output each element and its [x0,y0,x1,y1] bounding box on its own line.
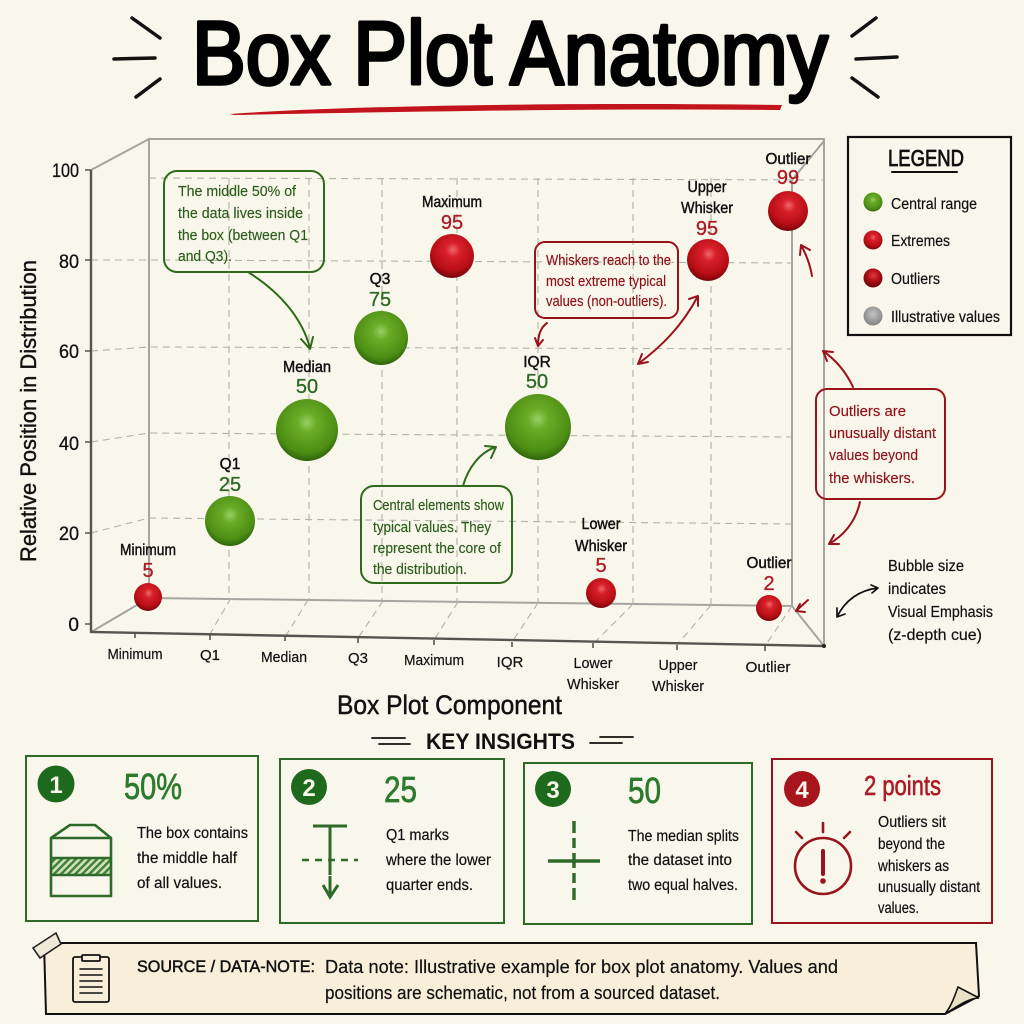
insight card 4: whiskers as [877,858,949,875]
insight card 3 [524,763,752,924]
bubble: Lower Whisker 5: Whisker [575,538,627,555]
icon: clipboard [73,955,109,1002]
x axis tick labels: Whisker [652,678,704,695]
heading: key insights [372,729,633,754]
bubble: Outlier 2: 2 [763,573,775,595]
bubble: IQR 50 [505,354,571,460]
source note banner: SOURCE / DATA-NOTE: [137,957,315,976]
icon: median split [548,821,600,900]
bubble: Q3 75 [354,271,408,365]
y axis tick labels: 80 [59,252,79,273]
insight card 2: where the lower [385,852,491,869]
arrow: central elements to IQR [463,446,496,486]
legend item: outliers: Outliers [891,271,940,288]
bubble: Lower Whisker 5: Lower [582,516,620,533]
bubble: Upper Whisker 95 [681,179,733,281]
y axis tick labels: 40 [59,434,79,455]
insight card 4: values. [878,900,919,917]
icon: box with hatched band [51,825,111,896]
insight card 4: Outliers sit [878,814,947,831]
callout: outliers: unusually distant [829,426,936,442]
bubble: Outlier 2: Outlier [746,555,792,572]
title accent strokes left [114,18,160,97]
insight card 4 [772,759,992,923]
bubble: Maximum 95 [422,194,482,278]
title red underline [230,104,782,115]
insight card 2: Q1 marks [386,827,449,844]
bubble: Outlier 99 [766,151,810,231]
insight card 1: The box contains [137,825,248,842]
bubble: Q1 25 [205,456,255,546]
callout: outliers: Outliers are [829,404,906,420]
insight card 3: the dataset into [628,852,732,869]
bubble: Median 50: 50 [296,376,318,398]
insight card 4: 2 points [864,770,941,801]
icon: alert [795,823,851,894]
bubble: Q3 75: 75 [369,289,391,311]
legend item: extremes: Extremes [891,233,950,250]
callout: outliers: the whiskers. [829,471,915,487]
bubble: Upper Whisker 95: Upper [688,179,726,196]
x axis tick labels: IQR [497,654,523,671]
y axis title: Relative Position in Distribution [16,260,41,562]
x axis tick labels: Q3 [348,650,368,667]
callout: central elements [361,486,512,583]
legend item: illustrative values [864,306,1000,326]
badge 3: 3 [546,777,560,804]
y axis tick labels: 100 [52,161,79,182]
badge 2 [291,769,327,805]
arrow: outliers callout down [829,502,860,544]
callout: middle 50%: the box (between Q1 [178,228,308,244]
insight card 1: the middle half [137,850,238,867]
x axis tick labels: Q1 [200,647,220,664]
bubble: Outlier 99: Outlier [766,151,810,168]
callout: middle 50% [164,171,324,272]
x axis tick labels: Lower [574,655,612,672]
insight card 1: of all values. [137,875,222,892]
source note banner: positions are schematic, not from a sourced dataset. [325,983,720,1003]
insight card 3: The median splits [628,828,739,845]
x axis tick labels: Upper [658,657,698,674]
callout: central elements: Central elements show [373,498,504,514]
callout: central elements: represent the core of [373,541,502,557]
legend item: central range [864,192,977,213]
title: Box Plot Anatomy [192,4,828,104]
y axis tick labels [52,161,79,636]
bubble: IQR 50: IQR [523,354,551,371]
callout: whiskers [535,242,678,318]
badge 1: 1 [49,772,63,799]
insight card 1: 50% [124,766,182,807]
bubble: Outlier 2 [746,555,792,621]
icon: Q1 marker arrow [302,826,358,897]
arrow: to outlier 2 [796,600,808,612]
callout: middle 50%: the data lives inside [178,206,303,222]
badge 4: 4 [795,777,809,804]
bubble: Outlier 99: 99 [777,167,799,189]
bubble: Minimum 5 [120,542,176,611]
bubble: Maximum 95: Maximum [422,194,482,211]
bubble: Upper Whisker 95: Whisker [681,200,733,217]
callout: middle 50%: The middle 50% of [178,184,297,200]
bubble: Q3 75: Q3 [370,271,390,288]
chart frame and grid [85,139,826,651]
x axis tick labels: Minimum [108,646,162,663]
badge 3 [535,771,571,807]
callout: whiskers: values (non-outliers). [546,294,667,310]
note: bubble size: indicates [888,581,946,598]
legend: LEGEND [888,145,964,171]
bubble: Minimum 5: 5 [142,560,154,582]
legend item: central range: Central range [891,196,977,213]
badge 2: 2 [302,775,316,802]
insight card 2 [280,759,504,923]
tape [33,933,61,958]
bubble: Lower Whisker 5: 5 [595,555,607,577]
insight card 2: 25 [384,769,417,810]
arrow: middle 50% to median [248,272,313,349]
legend item: outliers [864,268,940,288]
note: bubble size: Visual Emphasis [888,604,993,621]
callout: central elements: the distribution. [373,562,467,578]
bubble: IQR 50: 50 [526,371,548,393]
arrow: outliers callout up [823,351,853,387]
note: bubble size [837,558,993,644]
bubble: Lower Whisker 5 [575,516,627,608]
arrow: bubble size double-headed [837,585,878,617]
bubble: Minimum 5: Minimum [120,542,176,559]
legend item: extremes [864,230,950,250]
insight card 3: 50 [628,770,661,811]
bubble: Q1 25: 25 [219,474,241,496]
x axis tick labels: Maximum [404,652,464,669]
x axis title: Box Plot Component [337,690,562,720]
badge 4 [784,771,820,807]
callout: outliers [816,389,945,499]
insight card 1 [26,756,258,921]
source note banner: Data note: Illustrative example for box plot anatomy. Values and [325,957,838,977]
chart: 3D bubble plot [16,139,826,720]
y axis tick labels: 60 [59,342,79,363]
insight card 2: quarter ends. [386,877,473,894]
page curl [945,987,979,1014]
note: bubble size: Bubble size [888,558,964,575]
arrow: whiskers callout to IQR [535,323,547,346]
x axis tick labels: Whisker [567,676,619,693]
bubble: Median 50: Median [283,359,331,376]
bubble: Median 50 [276,359,338,461]
x axis tick labels [108,646,790,695]
heading: key insights: KEY INSIGHTS [426,729,575,754]
insight card 4: beyond the [878,836,945,853]
bubble: Upper Whisker 95: 95 [696,218,718,240]
callout: outliers: values beyond [829,448,918,464]
bubble: Q1 25: Q1 [220,456,240,473]
arrow: whisker double-headed [638,296,698,364]
callout: central elements: typical values. They [373,520,492,536]
x axis tick labels: Median [261,649,307,666]
badge 1 [38,766,74,802]
legend item: illustrative values: Illustrative values [891,309,1000,326]
insight card 3: two equal halves. [628,877,738,894]
x axis tick labels: Outlier [746,659,790,676]
arrow: to outlier 99 [800,245,812,276]
callout: whiskers: most extreme typical [546,274,666,290]
y axis tick labels: 20 [59,524,79,545]
source note banner [33,933,979,1014]
note: bubble size: (z-depth cue) [888,627,982,644]
bubble: Maximum 95: 95 [441,212,463,234]
legend [848,137,1011,335]
callout: whiskers: Whiskers reach to the [546,253,671,269]
title accent strokes right [852,18,897,97]
callout: middle 50%: and Q3). [178,249,232,265]
insight card 4: unusually distant [878,879,981,896]
y axis tick labels: 0 [68,615,79,636]
